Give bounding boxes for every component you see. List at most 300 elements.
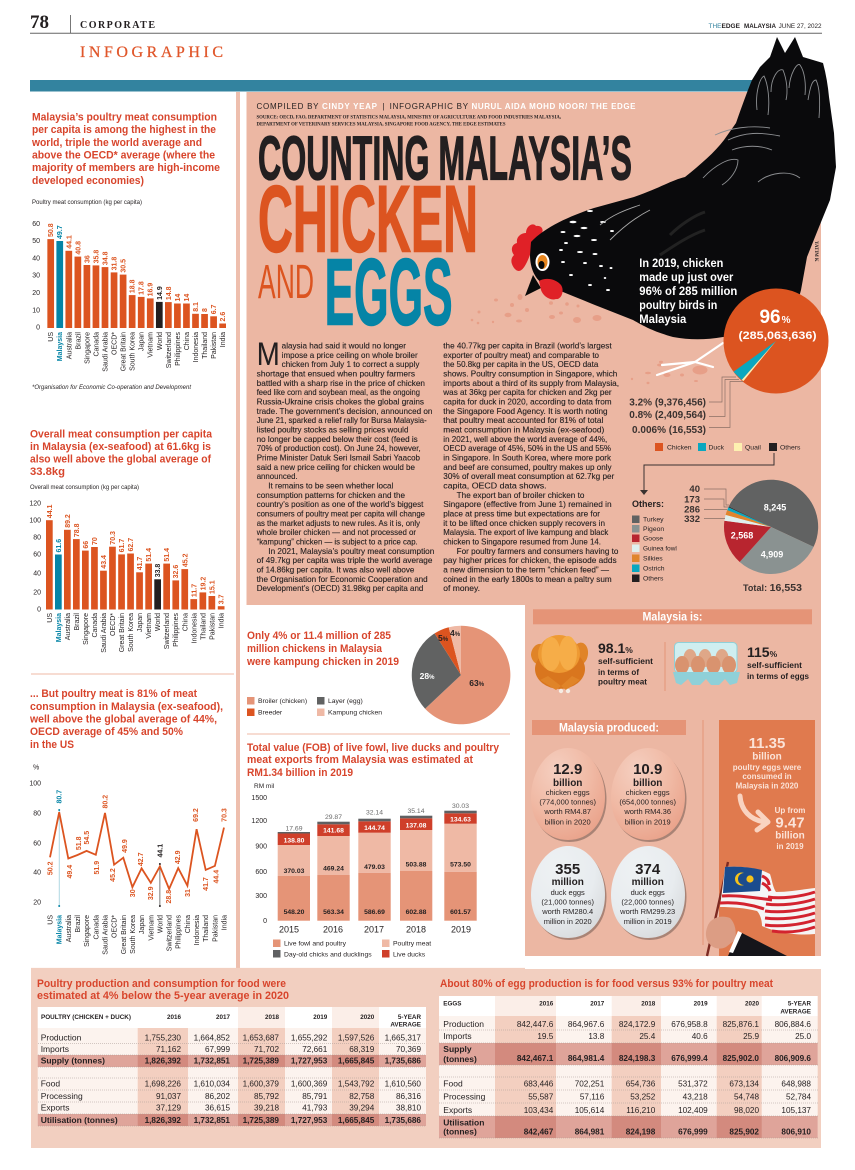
column one: impose a price ceiling on whole broiler (282, 351, 418, 360)
stat: egg self-sufficiency (747, 644, 810, 681)
table: 2018 (641, 1000, 656, 1008)
heading: above the OECD* average (where the (32, 150, 215, 162)
table: 1,725,389 (243, 1057, 279, 1066)
stacked bar chart: 1500 (251, 795, 267, 802)
column one: chicken from July 1 to correct a supply (282, 360, 419, 369)
bar chart: Singapore (84, 332, 91, 364)
hen caption: Malaysia (639, 312, 687, 326)
table (439, 996, 818, 1138)
bar chart: 40 (32, 256, 40, 262)
pie chart: poultry birds by type: 96% (759, 307, 791, 328)
pie chart: 28% (420, 671, 435, 681)
bar chart: 62.7 (128, 538, 135, 552)
stat: 9.47 billion: in 2019 (776, 842, 804, 851)
egg: duck eggs 2020: million in 2020 (544, 917, 592, 926)
column two: meat consumption in Malaysia (ex-seafood) (443, 426, 605, 434)
panel: Malaysia is self-sufficient (531, 609, 812, 693)
stacked bar chart: 573.50 (450, 862, 471, 868)
pie callouts: others (684, 484, 729, 525)
table: 825,902.0 (723, 1054, 759, 1063)
table: 1,597,526 (338, 1034, 375, 1043)
bar chart: 50 (32, 238, 40, 245)
hen feather lines (600, 65, 820, 255)
table: (tonnes) (443, 1054, 477, 1064)
column two: it to be lifted once chicken supply recovers in (443, 519, 605, 528)
table: 13.8 (588, 1032, 605, 1041)
pie chart: other poultry: 2,568 (731, 530, 753, 540)
chart subtitle: Overall meat consumption (kg per capita) (30, 484, 139, 491)
stacked bar chart: 2019 (451, 924, 471, 934)
table: 1,610,034 (194, 1080, 230, 1089)
bar chart: 30 (32, 272, 40, 280)
table: 2020 (745, 1000, 759, 1008)
title (258, 124, 632, 346)
line chart: Australia (66, 915, 73, 942)
bar chart: 10 (32, 308, 40, 314)
table: 68,319 (349, 1045, 375, 1054)
column two: OECD average of 45%, 50% in the US and 55% (443, 444, 611, 453)
line chart: Saudi Arabia (102, 915, 110, 955)
hen caption (639, 256, 737, 326)
table: EGGS (443, 1000, 462, 1008)
pie callouts (629, 377, 743, 436)
stat: 9.47 billion (775, 806, 805, 851)
column two: and beef are consumed, poultry makes up only (443, 463, 612, 472)
table: 116,210 (626, 1106, 656, 1115)
column two: For poultry farmers and consumers having to (457, 547, 619, 556)
bar chart: Saudi Arabia (102, 332, 110, 372)
stacked bar chart: 370.03 (284, 868, 305, 875)
bar chart: 45.2 (182, 553, 189, 567)
table: Production (41, 1033, 82, 1043)
stat: 11.35 billion: Malaysia in 2020 (736, 782, 799, 790)
table: 2016 (539, 1000, 554, 1008)
hen caption: In 2019, chicken (639, 256, 723, 270)
banner: Malaysia produced: (559, 722, 659, 734)
bar chart: China (184, 332, 191, 350)
bar chart: 70.3 (110, 531, 117, 545)
column one: of 49.7kg per capita was triple the world average (257, 556, 433, 565)
table: Production (443, 1019, 484, 1029)
table: 1,735,686 (385, 1116, 421, 1125)
pie chart: poultry birds by type: (285,063,636) (738, 330, 817, 342)
banner: Malaysia is: (642, 612, 702, 624)
table: 1,727,953 (291, 1057, 328, 1066)
legend: Poultry meat (393, 941, 431, 948)
egg: duck eggs 2020: 355 (555, 861, 580, 878)
bar chart: 60 (32, 221, 40, 228)
bar chart: OECD* (110, 613, 117, 636)
bar chart: 2.6 (220, 312, 227, 322)
heading: meat exports from Malaysia was estimated at (247, 754, 473, 766)
egg: duck eggs 2019: 374 (635, 861, 661, 878)
line chart: 80 (33, 810, 41, 818)
line chart: 44.1 (158, 844, 164, 858)
table: 1,826,392 (145, 1057, 181, 1066)
bar chart: World (155, 613, 162, 631)
bar chart: 49.7 (57, 225, 64, 239)
bar chart: 78.8 (74, 523, 81, 537)
line chart: Thailand (203, 915, 210, 942)
bar chart: 61.7 (119, 539, 126, 552)
legend: poultry type (655, 443, 801, 452)
stat: poultry self-sufficiency: poultry meat (598, 678, 647, 686)
stacked bar chart: 586.69 (364, 909, 385, 916)
bar chart: 14 (184, 294, 191, 302)
legend: poultry type: Others (780, 444, 801, 452)
heading: million chickens in Malaysia (247, 643, 383, 655)
column one: as the market adjusts to new rules. As it is, only (257, 519, 420, 528)
heading: in Malaysia (ex-seafood) at 61.6kg is (30, 441, 211, 453)
column one: no longer be capped below their cost (feed is (257, 435, 418, 444)
bar chart: US (48, 332, 55, 342)
column two: in Singapore. In South Korea, where more pork (443, 454, 612, 462)
table: 102,409 (678, 1106, 708, 1115)
bar chart: Philippines (173, 613, 180, 647)
column one: said a new price ceiling for chicken would be (257, 463, 416, 472)
table: 1,732,851 (194, 1116, 230, 1125)
pie total: Total: 16,553 (743, 582, 802, 594)
stat: 11.35 billion: poultry eggs were (733, 763, 802, 772)
egg: chicken eggs 2019: chicken eggs (626, 788, 670, 797)
stacked bar chart: 1200 (251, 818, 267, 825)
table: 702,251 (575, 1080, 605, 1089)
pie chart: 63% (469, 678, 485, 688)
bar chart: 8 (202, 308, 209, 312)
egg: duck eggs 2020: million (552, 877, 584, 888)
stat: poultry self-sufficiency: in terms of (598, 668, 639, 677)
column two: the 40.77kg per capita in Brazil (world’s largest (443, 342, 612, 350)
table: 103,434 (524, 1106, 554, 1115)
column two: shows. Poultry consumption in Singapore, which (443, 370, 617, 378)
table: 1,727,953 (291, 1116, 328, 1125)
table: 19.5 (537, 1032, 554, 1041)
stacked bar chart: 144.74 (364, 825, 385, 832)
table: 648,988 (781, 1080, 811, 1089)
line chart: Indonesia (194, 915, 201, 945)
table: Supply (tonnes) (41, 1056, 105, 1066)
column one: consumers of poultry meat per capita will change (257, 509, 426, 518)
panel: kampung chicken share (246, 626, 510, 724)
heading: Only 4% or 11.4 million of 285 (247, 630, 391, 642)
line chart: 70.3 (222, 808, 228, 822)
bar chart: 8.1 (193, 302, 200, 312)
table: AVERAGE (780, 1008, 811, 1016)
bar chart: 19.2 (200, 577, 207, 590)
table: 673,134 (729, 1080, 759, 1089)
line chart: 42.7 (138, 852, 145, 866)
stat: 11.35 billion: 11.35 (749, 735, 785, 752)
heading: consumption in Malaysia (ex-seafood), (30, 701, 223, 713)
table: 676,999.4 (671, 1054, 708, 1063)
heading: About 80% of egg production is for food versus 93% for poultry meat (440, 978, 773, 990)
line chart: 69.2 (193, 808, 200, 822)
panel: bottom tables background (31, 969, 821, 1148)
column two: pay higher prices for chicken, the episode adds (443, 556, 617, 565)
page header: JUNE 27, 2022 (779, 23, 822, 30)
table: 1,665,845 (338, 1116, 375, 1125)
table: AVERAGE (390, 1022, 421, 1028)
bar chart: Japan (139, 332, 146, 351)
legend: others (632, 499, 677, 582)
bar chart: 32.6 (173, 565, 180, 578)
panel: poultry production table (37, 978, 426, 1126)
bar chart: 40.8 (75, 241, 82, 255)
table: 654,736 (626, 1080, 656, 1089)
heading (37, 978, 289, 1002)
column one: 70% of production cost). On June 24, however, (257, 444, 421, 453)
column one: listed poultry stocks as selling prices would (257, 426, 408, 434)
line chart (29, 764, 228, 955)
illustration: grain on the ground (471, 294, 708, 384)
table: 864,967.6 (568, 1020, 605, 1029)
stacked bar chart: 137.08 (406, 822, 427, 830)
bar chart: US (47, 613, 54, 623)
bar chart: 35.8 (93, 250, 100, 263)
column one: shortage that ensued when poultry farmers (257, 370, 415, 378)
stacked bar chart (251, 783, 477, 934)
table: 40.6 (692, 1032, 708, 1041)
table: 41,793 (302, 1104, 328, 1113)
legend: poultry type: Chicken (667, 444, 692, 452)
bar chart: 70 (92, 537, 99, 545)
line chart: 60 (33, 840, 41, 848)
bar chart: China (182, 613, 189, 631)
column two: in 2021, well above the world average of 44%, (443, 435, 607, 444)
egg: duck eggs 2020: worth RM280.4 (541, 907, 593, 916)
line chart: Canada (93, 915, 100, 940)
column one: of 14.86kg per capita. It was also well above (257, 565, 415, 574)
credits and sources (256, 102, 636, 128)
egg: chicken eggs 2019: billion in 2019 (625, 818, 671, 826)
egg: chicken eggs 2019: (654,000 tonnes) (619, 798, 677, 806)
table: 5-YEAR (398, 1014, 421, 1021)
table: 1,665,845 (338, 1057, 375, 1066)
table: 1,698,226 (145, 1080, 181, 1089)
stacked bar chart: 32.14 (366, 810, 383, 816)
table: Utilisation (tonnes) (41, 1115, 118, 1125)
column one: the Organisation for Economic Cooperation and (257, 575, 428, 584)
stacked bar chart: 2016 (323, 924, 343, 934)
table: 39,294 (349, 1104, 375, 1113)
banner (533, 609, 812, 624)
heading (30, 428, 213, 478)
stat: poultry self-sufficiency (598, 640, 653, 686)
bar chart: 44.1 (47, 504, 54, 518)
line chart: US (48, 915, 54, 925)
stacked bar chart: 2017 (364, 924, 384, 934)
bar chart: 60 (33, 552, 41, 558)
icon: egg tray (673, 642, 740, 685)
title: AND (258, 256, 314, 309)
heading: Total value (FOB) of live fowl, live ducks and poultry (247, 742, 500, 754)
table: 85,791 (302, 1092, 328, 1101)
stat: poultry self-sufficiency: 98.1% (598, 640, 633, 656)
table: 806,884.6 (775, 1020, 811, 1029)
column one: Russia-Ukraine crisis chokes the global grains (257, 398, 424, 406)
line chart: 51.8 (76, 836, 83, 850)
egg: chicken eggs 2020: billion in 2020 (545, 818, 591, 826)
egg: duck eggs 2019: million (632, 877, 664, 888)
bar chart: Thailand (200, 613, 207, 640)
line chart: Pakistan (212, 915, 219, 942)
table: 91,037 (156, 1092, 181, 1101)
bar chart: 14.9 (157, 286, 164, 300)
legend: others: Guinea fowl (643, 546, 677, 552)
table: 36,615 (205, 1104, 230, 1113)
table: 71,162 (156, 1045, 181, 1054)
pie chart: other poultry: 4,909 (761, 550, 783, 560)
hen caption: made up just over (639, 270, 734, 284)
line chart: 80.7 (57, 790, 64, 804)
article body text (256, 336, 619, 593)
table: 67,999 (205, 1045, 230, 1054)
bar chart: Philippines (175, 332, 182, 366)
column one: “kampung” chicken — is subject to a price cap. (257, 537, 418, 546)
column two: of money. (443, 584, 480, 593)
panel: poultry meat consumption chart (31, 112, 227, 391)
legend: others: Ostrich (643, 566, 665, 572)
heading (247, 742, 500, 779)
stacked bar chart: 17.69 (285, 826, 303, 832)
pie callouts: 3.2% (9,376,456) (629, 398, 706, 408)
legend: others: Silkies (643, 556, 663, 562)
bar chart: 20 (32, 290, 40, 297)
egg: chicken eggs 2020 (531, 748, 606, 842)
column two: exporter of poultry meat) and comparable to (443, 351, 600, 360)
table: 842,467.1 (517, 1054, 554, 1063)
bar chart: Australia (66, 332, 73, 359)
bar chart: 61.6 (56, 539, 63, 552)
bar chart: Australia (65, 613, 72, 640)
table: 2017 (216, 1014, 230, 1021)
egg: chicken eggs 2019: billion (633, 778, 662, 789)
table: POULTRY (CHICKEN + DUCK) (41, 1014, 131, 1021)
column two: a new dimension to the term “chicken feed” — (443, 565, 609, 574)
column two: The export ban of broiler chicken to (457, 491, 585, 500)
line chart: South Korea (130, 915, 137, 954)
pie callouts: others: 40 (689, 484, 700, 495)
table: 71,702 (254, 1045, 279, 1054)
table: Food (443, 1079, 463, 1089)
table: 1,725,389 (243, 1116, 279, 1125)
egg: chicken eggs 2019: 10.9 (633, 761, 662, 778)
heading: were kampung chicken in 2019 (246, 656, 399, 668)
bar chart: 51.4 (164, 548, 171, 562)
line chart: Singapore (84, 915, 91, 947)
column two: capita, OECD data shows. (443, 482, 547, 490)
page header: THEEDGE (708, 23, 741, 30)
page header: 78 (30, 12, 49, 33)
line chart: 44.4 (214, 870, 220, 884)
legend: Day-old chicks and ducklings (284, 951, 372, 958)
pie callouts: others: 173 (684, 494, 700, 506)
pie chart (412, 626, 510, 724)
line chart: 32.9 (148, 886, 155, 900)
credits and sources: INFOGRAPHIC BY (390, 102, 469, 111)
line chart: 40 (33, 870, 41, 876)
table: 37,129 (156, 1104, 181, 1113)
stat: poultry self-sufficiency: self-sufficient (598, 657, 653, 666)
table: 2017 (590, 1000, 605, 1008)
stacked bar chart: 2018 (406, 924, 426, 934)
table: 864,981 (575, 1128, 605, 1137)
table (38, 1007, 426, 1126)
heading: ... But poultry meat is 81% of meat (30, 688, 197, 700)
line chart: OECD* (112, 915, 119, 938)
heading (246, 630, 399, 668)
table: 57,116 (580, 1093, 605, 1102)
bar chart: 100 (29, 518, 41, 524)
bar chart: 44.1 (66, 235, 73, 249)
table: 82,758 (349, 1092, 375, 1101)
stacked bar chart: 563.34 (323, 909, 344, 916)
arrow: increase (740, 796, 768, 830)
stat: 11.35 billion: consumed in (742, 772, 792, 781)
table: 1,600,379 (243, 1080, 279, 1089)
heading: well above the global average of 44%, (29, 714, 217, 726)
heading: 33.8kg (30, 466, 65, 478)
bar chart: India (220, 332, 227, 347)
drop cap: M (257, 336, 280, 372)
table: 1,732,851 (194, 1057, 230, 1066)
left column separator (236, 92, 240, 969)
column two: the Singapore Food Agency. It is worth noting (443, 407, 608, 416)
bar chart: Malaysia (57, 332, 64, 361)
egg: chicken eggs 2019: worth RM4.36 (623, 807, 671, 816)
table: 1,653,687 (243, 1034, 279, 1043)
heading: per capita is among the highest in the (32, 124, 216, 136)
table: 1,655,292 (291, 1034, 328, 1043)
bar chart: 6.7 (211, 304, 218, 314)
hen caption: 96% of 285 million (639, 284, 737, 298)
column one: country’s position as one of the world’s biggest (257, 500, 424, 509)
panel: eggs consumed (706, 720, 815, 956)
table: 1,826,392 (145, 1116, 181, 1125)
credits and sources: NURUL AIDA MOHD NOOR/ THE EDGE (472, 102, 636, 111)
stat: 9.47 billion: 9.47 (775, 814, 805, 832)
heading (31, 112, 220, 187)
table: 824,198 (626, 1128, 656, 1137)
line chart: 41.7 (203, 877, 210, 891)
table: 864,981.4 (568, 1054, 605, 1063)
stacked bar chart: 479.03 (364, 864, 385, 871)
bar chart: Thailand (202, 332, 209, 359)
egg: duck eggs 2019: duck eggs (631, 888, 665, 897)
table: 824,198.3 (619, 1054, 656, 1063)
bar chart: Singapore (83, 613, 90, 645)
stacked bar chart: 138.80 (284, 838, 305, 844)
hen comb (511, 224, 543, 271)
bar chart: 30.5 (121, 259, 128, 273)
legend: poultry type: Quail (745, 444, 761, 452)
table: Utilisation (443, 1118, 484, 1128)
stacked bar chart: 503.88 (406, 862, 427, 868)
table: 54,748 (734, 1093, 759, 1102)
table: 825,902 (729, 1128, 759, 1137)
table: 86,316 (396, 1092, 421, 1101)
table: 2019 (694, 1000, 708, 1008)
legend (273, 940, 431, 958)
stacked bar chart: RM mil (254, 783, 275, 790)
bar chart: 89.2 (65, 514, 72, 528)
pie callouts: others: 332 (684, 514, 700, 525)
table: 86,202 (205, 1092, 230, 1101)
column one: consumption patterns for chicken and the (257, 491, 406, 500)
legend: Breeder (258, 710, 283, 716)
bar chart: Brazil (75, 332, 82, 350)
hen plumage specks (559, 210, 614, 291)
